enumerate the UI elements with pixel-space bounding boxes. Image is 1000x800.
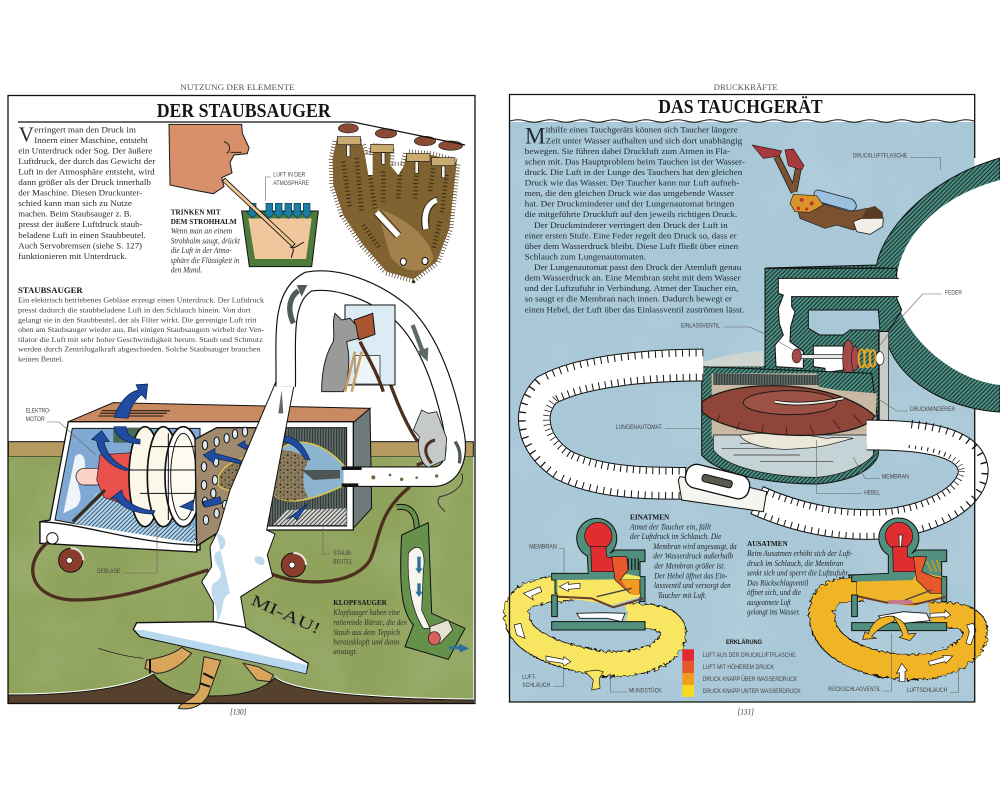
heading: Staubsauger: STAUBSAUGER [18,285,83,295]
caption: Trinken mit dem Strohhalm: DEM STROHHALM [171,217,237,226]
icon: cup with liquid [242,211,318,267]
legend: Erklärung: LUFT MIT HÖHEREM DRUCK [703,663,775,671]
regulator body [552,518,645,630]
label: Luftschlauch left [522,670,564,689]
text block: Staubsauger: oben am Staubsauger wieder aus. Bei einigen Staubsaugern wirbelt der Ven- [18,325,264,334]
caption: Ausatmen [746,539,853,617]
legend: Erklärung [682,638,801,697]
intro text block: presst der äußere Luftdruck staub- [18,219,143,229]
illustration: air hoses [534,365,973,524]
intro text block: die mitgeführte Druckluft auf den jeweils richtigen Druck. [525,209,737,219]
fan [129,427,202,527]
brown diaphragm disc [702,386,875,435]
hose tube joint to the bag [342,468,362,485]
icon: diver [752,145,883,234]
intro text block: dann größer als der Druck innerhalb [18,177,151,187]
power cord [33,360,433,600]
illustration: lung regulator [702,351,878,484]
perforated plate [195,427,262,546]
label: Rückschlagventil [828,633,892,693]
intro text block: erringert man den Druck im [34,124,136,134]
caption: Einatmen: Taucher mit Luft. [658,591,707,600]
label: Elektromotor: MOTOR [26,416,45,423]
caption: Einatmen: lassventil und versorgt den [654,581,731,590]
white flow arrows [897,610,976,682]
caption: Trinken mit dem Strohhalm: Wenn man an einem [171,227,233,236]
label: Luft in der Atmosphäre [266,172,310,201]
label: Staubbeutel: BEUTEL [333,558,353,566]
icon: upright beater vacuum [397,507,469,659]
caption: Trinken mit dem Strohhalm: TRINKEN MIT [171,208,221,217]
caption: Einatmen: Membran wird angesaugt, da [652,542,737,551]
caption: Ausatmen: senkt sich und sperrt die Luftzufuhr. [747,569,849,578]
intro text block: so saugt er die Membran nach innen. Dadurch bewegt er [525,294,732,304]
title: Der Staubsauger: DER STAUBSAUGER [157,100,331,122]
label: Gebläse [97,525,157,575]
intro text block: über dem Wasserdruck bleibt. Diese Luft fließt über einen [525,241,739,251]
caption: Einatmen: der Wasserdruck außerhalb [653,552,733,561]
dust in the hose [371,474,438,481]
icon: air pressure arrows [247,203,313,218]
interior [712,373,877,437]
label: Feder: FEDER [945,289,962,296]
wheels [59,548,306,577]
icon: cat at socket [322,305,395,392]
page frame left [8,96,475,704]
caption: Trinken mit dem Strohhalm: sphäre die Flüssigkeit in [171,256,239,265]
floor and wall background [8,442,474,704]
text block: Staubsauger: keinen Beutel. [18,354,63,364]
intro text block: Der Lungenautomat passt den Druck der Atemluft genau [534,262,742,272]
label: Lungenautomat: LUNGENAUTOMAT [616,424,662,431]
label: Elektromotor [26,408,96,455]
text block: Staubsauger: presst dadurch die staubbeladene Luft in den Schlauch hinein. Von dort [18,306,252,314]
legend: Erklärung: DRUCK KNAPP ÜBER WASSERDRUCK [703,675,798,683]
caption: Klopfsauger: Staub aus dem Teppich [333,628,400,637]
label: Lungenautomat [616,424,703,431]
intro text block: M [525,123,545,148]
illustration: inhale diagram [514,518,673,690]
caption: Trinken mit dem Strohhalm [171,208,241,275]
label: Einlassventil [681,322,793,350]
text block: Staubsauger: gelangt sie in den Staubbeutel, der als Filter wirkt. Die gereinigte Luft tritt [18,315,258,324]
white flow arrows [514,582,603,690]
intro text block: V [19,123,34,147]
tail [98,648,143,658]
intro text block: einen Hebel, der Luft über das Einlassventil zuströmen lässt. [525,304,744,314]
caption: Klopfsauger: rotierende Bürste, die den [333,618,407,627]
caption: Ausatmen: öffnet sich, und die [747,588,801,597]
side curve of lens [703,351,763,367]
label: Luft in der Atmosphäre: ATMOSPHÄRE [273,179,310,187]
intro text block: schen mit. Das Hauptproblem beim Tauchen ist der Wasser- [525,156,745,166]
orange air loop [822,588,975,667]
caption: Einatmen: der Luftdruck im Schlauch. Die [630,532,722,541]
flexible hose [286,281,456,477]
intro text block: Der Druckminderer verringert den Druck der Luft in [534,220,729,230]
intro text block: und der Luftzufuhr in Verbindung. Atmet der Taucher ein, [525,283,738,293]
air channel [775,278,898,368]
page number 130: [130] [230,706,246,716]
cat paws under nozzle [145,647,273,709]
label: Einlassventil: EINLASSVENTIL [681,322,720,329]
caption: Trinken mit dem Strohhalm: Strohhalm saugt, drückt [171,236,241,246]
grey pipe [879,332,889,428]
housing [702,367,878,484]
page frame right [510,94,975,702]
outlet valve [847,390,857,403]
head with mask [853,218,883,234]
caption: Klopfsauger: herausklopft und dann [333,638,399,646]
intro text block: dem Wasserdruck an. Eine Membran steht mit dem Wasser [525,273,741,283]
intro text block: Auch Servobremsen (siehe S. 127) [18,240,142,250]
caption: Trinken mit dem Strohhalm: den Mund. [171,266,202,275]
caption: Einatmen: Atmet der Taucher ein, fällt [629,522,712,531]
legs [777,157,798,192]
caption: Trinken mit dem Strohhalm: die Luft in der Atmo- [171,246,232,255]
mouthpiece [678,462,767,512]
spring and piston [843,340,884,377]
caption: Ausatmen: ausgeatmete Luft [747,598,791,607]
intro text block: Innern einer Maschine, entsteht [34,135,148,145]
caption: Klopfsauger: ansaugt. [333,647,357,656]
label: Hebel [817,440,880,496]
label: Membran (small) [529,544,564,573]
intro text block: ein Unterdruck oder Sog. Der äußere [18,145,153,155]
label: Membran (small): MEMBRAN [529,544,557,551]
label: Luftschlauch left: SCHLAUCH [522,682,551,689]
water surface line [510,120,974,122]
label: Luftschlauch left: LUFT- [522,674,536,681]
intro text block: hat. Der Druckminderer und der Lungenautomat bringen [525,199,735,209]
caption: Klopfsauger [332,598,407,656]
caption: Ausatmen: AUSATMEN [747,539,788,548]
icon: face [169,124,249,194]
valve chamber [813,346,866,404]
intro text block: Luftdruck, der durch das Gewicht der [18,156,155,166]
caption: Ausatmen: Das Rückschlagventil [746,578,809,587]
icon: mouse on cord [413,410,463,512]
title: Das Tauchgerät: DAS TAUCHGERÄT [658,95,823,118]
yellow air loop [517,588,673,664]
label: Membran (main) [853,457,909,481]
motor [73,453,137,522]
label: Elektromotor: ELEKTRO- [26,408,51,415]
text block: Staubsauger: werden durch Zentrifugalkraft abgeschieden. Solche Staubsauger brauchen [18,345,261,354]
caption: Einatmen: EINATMEN [630,512,670,521]
label: Gebläse: GEBLÄSE [97,567,121,575]
label: Druckluftflasche [853,152,941,170]
label: Luftschlauch right [907,667,958,694]
label: Druckminderer [880,400,955,413]
illustration: exhale diagram [822,518,976,682]
intro text block: funktionieren mit Unterdruck. [18,251,127,261]
label: Druckminderer: DRUCKMINDERER [910,406,955,413]
intro text block: men, die den gleichen Druck wie das umgebende Wasser [525,188,734,198]
intro text block: schied kann man sich zu Nutze [18,198,132,208]
exhale bubbles arrows [863,616,916,641]
caption: Ausatmen: druck im Schlauch, die Membran [747,559,843,568]
pegs on washing line [337,124,463,178]
illustration: pressure regulator housing [702,268,903,428]
caption: Klopfsauger: KLOPFSAUGER [333,598,387,607]
intro text block: bewegen. Sie führen dabei Druckluft zum Atmen in Fla- [525,146,730,156]
floor nozzle [133,622,308,673]
label: Mundstück [611,673,662,695]
panel: right page, diving apparatus [510,82,1000,716]
intro text block: druck. Die Luft in der Lunge des Tauchers hat den gleichen [525,167,743,177]
intro text block: einer ersten Stufe. Eine Feder regelt den Druck so, dass er [525,230,737,240]
label: Staubbeutel [323,525,353,566]
intro text block: machen. Beim Staubsauger z. B. [18,209,132,219]
air tank [814,190,856,211]
running head left: NUTZUNG DER ELEMENTE [180,82,295,92]
body and arms [798,201,872,230]
main suction tube [202,380,295,628]
panel: left page, vacuum cleaner [8,82,475,716]
text block: Staubsauger: tilator die Luft mit sehr hoher Geschwindigkeit herum. Staub und Schmutz [18,335,263,344]
legend: Erklärung: DRUCK KNAPP UNTER WASSERDRUCK [703,688,801,695]
intro text block: Zeit unter Wasser aufhalten und sich dort unabhängig [546,135,743,145]
illustration: hose loop with socket and cat [278,281,460,485]
water background [510,122,974,702]
text block: Staubsauger [18,296,264,364]
right hose [757,433,973,524]
intro text block: beladene Luft in einen Staubbeutel. [18,230,146,240]
label: Membran (main): MEMBRAN [882,474,909,481]
intro text block: Schlauch zum Lungenautomaten. [525,252,646,262]
intro text block: Luft in der Atmosphäre entsteht, wird [18,166,155,176]
icon: straw [223,179,304,258]
intro text block [18,123,155,261]
legend: Erklärung: ERKLÄRUNG [726,638,762,646]
caption: Klopfsauger: Klopfsauger haben eine [332,608,400,617]
regulator body [852,518,947,631]
base [40,522,197,552]
blue airflow arrows [92,384,310,520]
inlet valve and stem [792,349,845,363]
left hose [534,365,703,483]
page number 131: [131] [738,706,754,716]
dust bag [270,442,345,501]
label: Mundstück: MUNDSTÜCK [629,687,662,695]
illustration: mouse hanging from clothes pegs [333,124,463,279]
text block: Staubsauger: Ein elektrisch betriebenes Gebläse erzeugt einen Unterdruck. Der Luftdruck [18,296,264,305]
illustration: drinking with a straw [169,124,318,267]
caption: Ausatmen: Beim Ausatmen erhöht sich der Luft- [747,549,853,558]
label: Staubbeutel: STAUB- [333,550,352,557]
label: Feder [880,289,962,345]
label: Rückschlagventil: RÜCKSCHLAGVENTIL [828,685,881,693]
exclamation: Mi-Au: MI-AU! [248,592,323,638]
intro text block: der Maschine. Diesen Druckunter- [18,188,142,198]
caption: Einatmen: Der Hebel öffnet das Ein- [653,571,728,580]
caption: Einatmen [629,512,737,600]
chamber with water [808,310,880,335]
caption: Ausatmen: gelangt ins Wasser. [747,608,800,617]
label: Luftschlauch right: LUFTSCHLAUCH [907,687,948,694]
hose airflow arrows [278,285,460,463]
illustration: compressed air tank wall [766,158,1000,412]
legend: Erklärung: LUFT AUS DER DRUCKLUFTFLASCHE [703,652,796,659]
label: Luft in der Atmosphäre: LUFT IN DER [273,172,306,178]
running head right: DRUCKKRÄFTE [714,82,778,92]
intro text block: ithilfe eines Tauchgeräts können sich Taucher längere [546,125,738,135]
illustration: vacuum cleaner cross-section [33,360,433,709]
shorts [790,194,823,212]
vacuum body [40,403,372,550]
caption: Einatmen: der Membran größer ist. [654,562,725,571]
label: Hebel: HEBEL [864,489,880,496]
intro text block: Druck wie das Wasser. Der Taucher kann nur Luft aufneh- [525,178,739,188]
intro text block [525,123,745,314]
label: Druckluftflasche: DRUCKLUFTFLASCHE [853,152,908,160]
fins [752,145,804,170]
